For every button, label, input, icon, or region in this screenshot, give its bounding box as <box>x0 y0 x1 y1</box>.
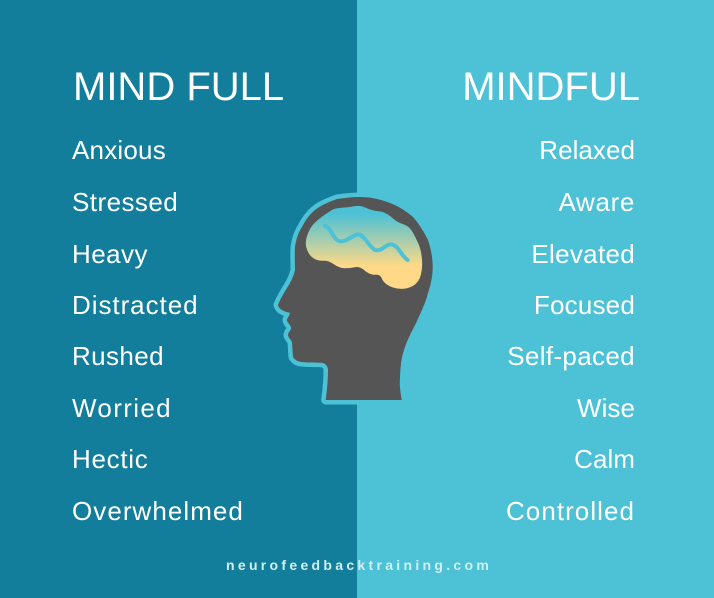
list: mind full states: Rushed <box>72 341 164 371</box>
list: mindful states: Elevated <box>531 239 635 269</box>
brain wave <box>325 226 408 260</box>
list: mind full states: Anxious <box>72 135 166 165</box>
list: mindful states <box>506 135 635 526</box>
head silhouette <box>278 197 433 400</box>
list: mind full states: Overwhelmed <box>72 496 244 526</box>
list: mindful states: Calm <box>574 444 635 474</box>
list: mindful states: Focused <box>534 290 635 320</box>
list: mind full states: Heavy <box>72 239 148 269</box>
list: mindful states: Relaxed <box>539 135 635 165</box>
list: mind full states: Worried <box>72 393 172 423</box>
footer: website: neurofeedbacktraining.com <box>226 557 492 573</box>
list: mind full states: Distracted <box>72 290 199 320</box>
heading: MINDFUL: MINDFUL <box>462 65 640 109</box>
heading: MIND FULL: MIND FULL <box>73 65 284 109</box>
list: mindful states: Controlled <box>506 496 635 526</box>
list: mindful states: Wise <box>577 393 635 423</box>
list: mind full states: Stressed <box>72 187 178 217</box>
brain <box>307 207 421 288</box>
list: mind full states <box>72 135 244 526</box>
right panel: mindful <box>357 0 714 598</box>
left panel: mind full <box>0 0 357 598</box>
list: mindful states: Self-paced <box>507 341 635 371</box>
list: mindful states: Aware <box>559 187 635 217</box>
list: mind full states: Hectic <box>72 444 148 474</box>
